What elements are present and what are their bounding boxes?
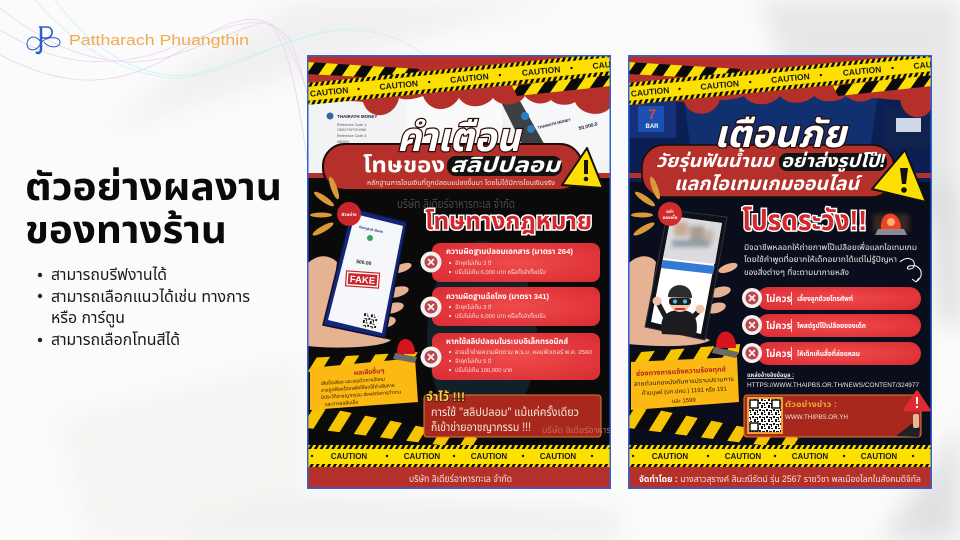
footer xyxy=(628,467,932,489)
caution tape top: CAUTION xyxy=(521,64,561,78)
callout: remember: การใช้ "สลิปปลอม" แม้แค่ครั้งเดียว xyxy=(431,405,579,419)
callout: remember: บริษัท ลิเดียร์อาหาร xyxy=(542,425,611,435)
callout: remember: ก็เข้าข่ายอาชญากรรม !!! xyxy=(431,420,531,434)
slip photo: Reference Code 1: xyxy=(337,123,367,127)
bullet list: สามารถบรีฟงานได้ xyxy=(51,267,167,284)
icon: hand holding warning sign xyxy=(896,392,929,437)
panel: complaint channels: ค้ามนุษย์ (บก.ปคม.) 1191 หรือ 191 xyxy=(642,386,728,397)
hazard stripes lower left xyxy=(307,352,483,446)
illustration: thief xyxy=(652,285,704,336)
game background xyxy=(628,92,932,182)
do-not pill 3 xyxy=(742,342,921,365)
bullet list: สามารถเลือกโทนสีได้ xyxy=(51,332,180,349)
caution tape top: CAUTION xyxy=(450,71,489,85)
do-not pill 2 xyxy=(742,314,921,337)
callout: remember: จำไว้ !!! xyxy=(426,390,465,404)
badge: หลงเชื่อ xyxy=(663,214,678,220)
penalty card 2: จำคุกไม่เกิน 3 ปี xyxy=(455,304,492,311)
red title pill xyxy=(323,144,582,190)
brand name: Pattharach Phuangthin xyxy=(69,33,249,49)
penalty card 2: ปรับไม่เกิน 6,000 บาท หรือทั้งจำทั้งปรับ xyxy=(455,312,546,320)
heading: ตัวอย่างผลงาน xyxy=(25,167,282,209)
title: คำเตือน xyxy=(397,116,523,160)
footer: บริษัท ลิเดียร์อาหารทะเล จำกัด xyxy=(409,474,512,485)
slip photo: 50,000.0 xyxy=(578,121,599,132)
caution tape bottom: CAUTION xyxy=(404,452,440,461)
panel: sample news: WWW.THIPBS.OR.YH xyxy=(785,415,848,421)
heading: ของทางร้าน xyxy=(25,210,227,252)
penalty card 2: ความผิดฐานฉ้อโกง (มาตรา 341) xyxy=(446,292,549,301)
slip photo: GEB7YXPYE49W xyxy=(337,128,367,132)
bullet list: สามารถเลือกแนวได้เช่น ทางการ xyxy=(51,288,250,306)
source reference: HTTPS://WWW.THAIPBS.OR.TH/NEWS/CONTENT/324977 xyxy=(747,382,919,389)
title xyxy=(642,114,894,197)
poster: teen grooming warning xyxy=(628,55,932,489)
icon: siren xyxy=(873,214,909,235)
panel: complaint channels: ช่องทางการแจ้งความร้องทุกข์ xyxy=(636,365,726,379)
panel: complaint channels xyxy=(631,357,739,410)
section heading: โปรดระวัง!! xyxy=(742,205,867,236)
illustration: backdrop figure xyxy=(427,241,537,394)
title: แลกไอเทมเกมออนไลน์ xyxy=(674,174,863,195)
caution tape top xyxy=(630,56,930,105)
panel: consequences: และการขอสินเชื่อ xyxy=(325,398,359,408)
do-not pill 2: ไม่ควร xyxy=(766,320,791,332)
title: สลิปปลอม xyxy=(450,154,562,177)
title: อย่าส่งรูปโป๊! xyxy=(781,151,886,172)
penalty card 3: หากใช้สลิปปลอมในระบบอิเล็กทรอนิกส์ xyxy=(446,337,568,346)
hazard tape top xyxy=(628,62,932,96)
warning paragraph: โดยใช้คำพูดที่อยากให้เด็กอยากได้แต่ไม่รู้ปัญหา xyxy=(744,253,897,265)
penalty card 1: จำคุกไม่เกิน 3 ปี xyxy=(455,260,492,267)
do-not pill 3: ไม่ควร xyxy=(766,348,791,360)
caution tape bottom: CAUTION xyxy=(652,452,688,461)
game background: BAR xyxy=(646,124,659,130)
title: วัยรุ่นฟันน้ำนม xyxy=(656,148,775,172)
do-not pill 1: เลี้ยงลูกด้วยโทรศัพท์ xyxy=(797,293,853,303)
panel: sample news: ตัวอย่างข่าว : xyxy=(785,398,837,409)
caution tape top xyxy=(308,56,610,105)
warning paragraph: มิจฉาชีพหลอกให้ถ่ายภาพโป๊เปลือยเพื่อแลกไอเทมเกม xyxy=(744,241,917,252)
logo xyxy=(27,27,249,53)
warning paragraph xyxy=(744,241,917,277)
penalty card 3: อาจเข้าข่ายความผิดตาม พ.ร.บ. คอมพิวเตอร์ พ.ศ. 2560 xyxy=(455,349,592,356)
footer xyxy=(307,467,611,489)
panel: consequences xyxy=(310,358,418,410)
red awning xyxy=(628,55,932,117)
caution tape top: CAUTION xyxy=(771,71,810,85)
penalty card 1 xyxy=(420,243,600,282)
caution tape top: CAUTION xyxy=(309,85,349,99)
bullet list xyxy=(38,267,250,349)
icon: starburst rays xyxy=(310,176,339,236)
game background: 7 xyxy=(648,106,656,122)
badge: ตัวอย่าง xyxy=(341,210,357,217)
panel: consequences: ผลเสียอื่นๆ xyxy=(354,366,385,377)
hazard stripes lower left xyxy=(628,344,804,446)
caution tape bottom: CAUTION xyxy=(861,452,897,461)
panel: complaint channels: สายด่วนกองบังคับการปราบปรามการ xyxy=(634,376,734,388)
do-not pill 1 xyxy=(742,287,921,310)
caution tape bottom: CAUTION xyxy=(331,452,367,461)
title: โทษของ xyxy=(363,154,445,177)
caution tape bottom: CAUTION xyxy=(540,452,576,461)
footer: จัดทำโดย : นางสาวสุรางค์ สิมะณีรัตน์ รุ่น 2567 รายวิชา พลเมืองโลกในสังคมดิจิทัล xyxy=(639,474,921,484)
illustration: hand with phone xyxy=(307,208,413,348)
penalty card 1: ความผิดฐานปลอมเอกสาร (มาตรา 264) xyxy=(446,247,574,256)
illustration: hand with phone: 500.00 xyxy=(356,259,372,267)
penalty card 3: จำคุกไม่เกิน 5 ปี xyxy=(455,358,492,365)
callout: remember xyxy=(424,390,611,437)
illustration: hand with phone: Bangkok Bank xyxy=(359,225,383,234)
red awning xyxy=(307,55,611,115)
penalty card 2 xyxy=(420,287,600,326)
heading xyxy=(25,167,282,252)
panel: consequences: มีประวัติอาชญากรรม ส่งผลต่อการทำงาน xyxy=(321,388,401,401)
caution tape bottom: CAUTION xyxy=(792,452,828,461)
panel: sample news xyxy=(744,392,929,437)
slip photo: Reference Code 3: xyxy=(337,134,367,138)
badge: อย่า xyxy=(666,207,674,214)
icon: siren xyxy=(712,332,738,358)
caution tape top: CAUTION xyxy=(700,78,739,92)
qr code xyxy=(747,397,783,434)
fake stamp: FAKE xyxy=(349,274,375,287)
caution tape top: CAUTION xyxy=(630,85,670,99)
penalty card 3 xyxy=(420,333,600,380)
panel: complaint channels: และ 1599 xyxy=(672,398,697,405)
icon: warning triangle xyxy=(562,148,603,188)
title: หลักฐานการโอนเงินที่ถูกปลอมแปลงขึ้นมา โดยไม่ได้มีการโอนเงินจริง xyxy=(367,177,555,187)
watermark: บริษัท ลิเดียร์อาหารทะเล จำกัด xyxy=(397,197,515,211)
caution tape bottom xyxy=(307,445,611,468)
caution tape bottom: CAUTION xyxy=(725,452,761,461)
badge xyxy=(658,202,682,226)
icon: starburst rays xyxy=(631,176,660,236)
section heading: โทษทางกฎหมาย xyxy=(425,208,592,235)
red title pill xyxy=(642,145,894,197)
illustration: hand with phone xyxy=(628,210,739,346)
panel: consequences: อาจถูกฟ้องร้องแพ่งให้ชดใช้ค่าเสียหาย xyxy=(321,382,395,394)
bullet list: หรือ การ์ตูน xyxy=(51,310,125,327)
poster: fake slip warning xyxy=(307,55,611,489)
icon: curved arrow xyxy=(900,258,921,282)
panel: consequences: เสียชื่อเสียง และเครดิตทางสังคม xyxy=(321,375,385,387)
panel: legal penalties xyxy=(420,243,600,380)
slip photo: THAIRATH MONEY xyxy=(537,118,572,130)
slip photo: 080000 xyxy=(337,140,349,144)
warning paragraph: ของสิ่งต่างๆ ที่จะตามมาภายหลัง xyxy=(744,266,849,277)
caution tape bottom: CAUTION xyxy=(471,452,507,461)
source reference xyxy=(747,371,919,389)
penalty card 1: ปรับไม่เกิน 6,000 บาท หรือทั้งจำทั้งปรับ xyxy=(455,268,546,276)
source reference: แหล่งอ้างอิงข้อมูล : xyxy=(747,371,794,379)
penalty card 3: ปรับไม่เกิน 100,000 บาท xyxy=(455,367,513,374)
qr code xyxy=(362,313,378,329)
caution tape bottom xyxy=(628,445,932,468)
slip photo: THAIRATH MONEY xyxy=(337,114,377,119)
caution tape top: CAUTION xyxy=(913,57,952,71)
do-not pill 2: โพสต์รูปโป๊เปลือยของเด็ก xyxy=(797,322,866,330)
do-not pill 3: ให้เด็กเห็นสื่อที่ล่อแหลม xyxy=(797,348,860,358)
badge xyxy=(337,202,361,226)
caution tape top: CAUTION xyxy=(842,64,882,78)
caution tape top: CAUTION xyxy=(379,78,418,92)
panel: do-not list xyxy=(742,287,921,365)
slip photo xyxy=(307,92,611,178)
logo mark xyxy=(27,27,60,53)
icon: warning triangle xyxy=(872,150,926,202)
icon: siren xyxy=(393,339,417,363)
hazard tape top xyxy=(307,62,611,96)
title xyxy=(323,116,582,190)
title: เตือนภัย xyxy=(714,114,849,156)
caution tape top: CAUTION xyxy=(592,57,631,71)
do-not pill 1: ไม่ควร xyxy=(766,293,791,305)
